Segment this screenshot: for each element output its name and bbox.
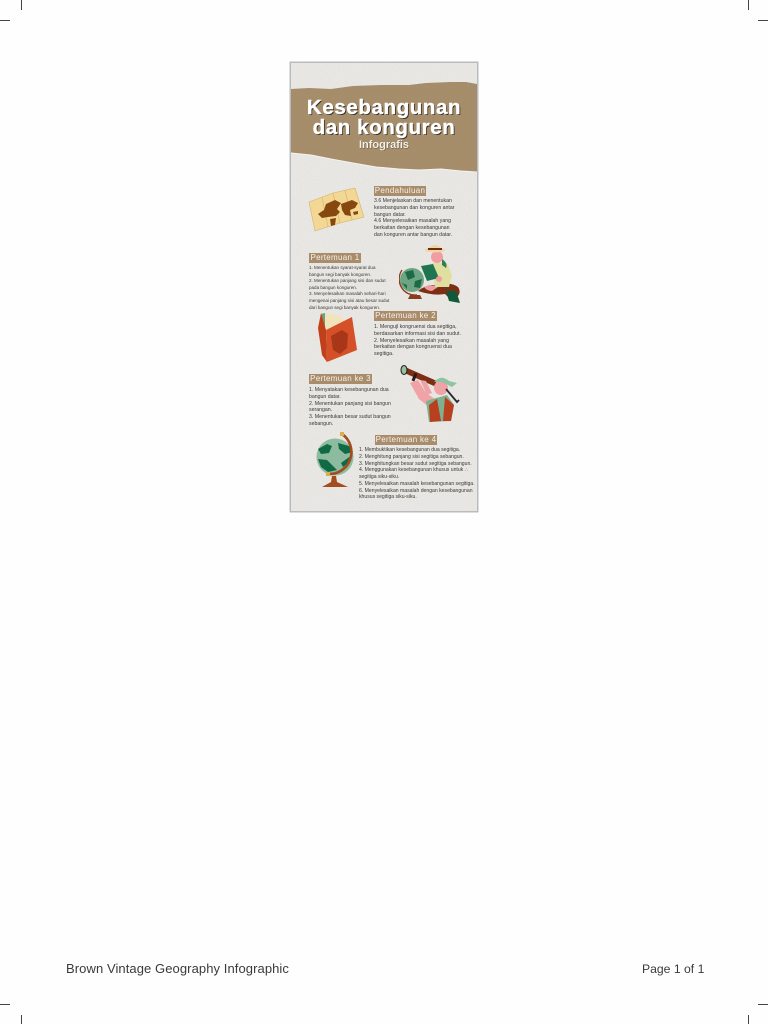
- icon: explorer with globe: [399, 245, 460, 303]
- text: Pertemuan 1 body: [309, 265, 390, 310]
- torn paper header band: [291, 63, 477, 511]
- title: [307, 96, 461, 139]
- section: Pertemuan 1: [309, 253, 390, 310]
- title: Kesebangunan: [307, 96, 461, 119]
- text: Pertemuan 1 body: pada bangun konguren.: [309, 285, 357, 290]
- text: Pertemuan ke 4 body: 6. Menyelesaikan masalah dengan kesebangunan: [359, 488, 473, 494]
- infographic poster: [291, 63, 477, 511]
- text: Pertemuan ke 4 body: 3. Menghitungkan besar sudut segitiga sebangun.: [359, 460, 472, 466]
- text: Pertemuan ke 3 body: serangan.: [309, 407, 332, 413]
- text: Pertemuan ke 2 body: 2. Menyelesaikan masalah yang: [374, 338, 449, 344]
- text: Pertemuan ke 4 body: 1. Membuktikan kesebangunan dua segitiga.: [359, 447, 460, 453]
- text: Pertemuan ke 3 body: 1. Menyatakan kesebangunan dua: [309, 387, 389, 393]
- section: Pertemuan ke 4: [359, 435, 475, 500]
- heading: Pertemuan 1: Pertemuan 1: [310, 253, 360, 262]
- text: Pendahuluan body: dan konguren antar bangun datar.: [374, 232, 452, 238]
- text: Pertemuan ke 3 body: [309, 387, 391, 427]
- text: Pendahuluan body: berkaitan dengan kesebangunan: [374, 225, 450, 231]
- text: Pendahuluan body: kesebangunan dan konguren antar: [374, 205, 454, 211]
- subtitle: Infografis: [359, 139, 409, 151]
- text: Pertemuan ke 3 body: sebangun.: [309, 421, 333, 427]
- text: Pertemuan 1 body: dari bangun segi banyak konguren.: [309, 305, 380, 310]
- heading: Pertemuan ke 3: Pertemuan ke 3: [310, 374, 371, 383]
- text: Pertemuan ke 2 body: 1. Mengujl kongruensi dua segitiga,: [374, 324, 457, 330]
- text: Pertemuan ke 4 body: khusus segitiga siku-siku.: [359, 494, 417, 500]
- text: Pertemuan 1 body: mengenai panjang sisi atau besar sudut: [309, 298, 389, 303]
- icon: globe: [316, 432, 354, 487]
- text: Pertemuan ke 3 body: 3. Menentukan besar sudut bangun: [309, 414, 391, 420]
- text: Pertemuan ke 4 body: 4. Menggunakan kesebangunan khusus untuk ∴: [359, 467, 468, 473]
- footer: document title: Brown Vintage Geography Infographic: [66, 961, 289, 976]
- text: Pertemuan ke 3 body: bangun datar.: [309, 394, 341, 400]
- text: Pertemuan 1 body: 1. Menentukan syarat-syarat dua: [309, 265, 375, 270]
- text: Pertemuan ke 2 body: segitiga.: [374, 351, 394, 357]
- text: Pertemuan ke 4 body: segitiga siku-siku.: [359, 474, 399, 480]
- text: Pertemuan ke 2 body: berkaitan dengan kongruensi dua: [374, 344, 452, 350]
- text: Pendahuluan body: bangun datar.: [374, 212, 406, 218]
- icon: explorer with telescope: [400, 365, 460, 422]
- heading: Pertemuan ke 4: Pertemuan ke 4: [376, 435, 436, 444]
- heading: Pertemuan ke 2: Pertemuan ke 2: [375, 311, 436, 320]
- text: Pertemuan 1 body: bangun segi banyak konguren.: [309, 272, 371, 277]
- title: dan konguren: [313, 116, 455, 139]
- text: Pertemuan ke 4 body: 5. Menyelesaikan masalah kesebangunan segitiga.: [359, 481, 475, 487]
- text: Pendahuluan body: 3.6 Menjelaskan dan menentukan: [374, 198, 452, 204]
- section: Pertemuan ke 2: [374, 311, 461, 357]
- text: Pertemuan 1 body: 3. Menyelesaikan masalah sehari-hari: [309, 291, 386, 296]
- icon: red book: [318, 313, 357, 362]
- text: Pertemuan ke 4 body: 2. Menghitung panjang sisi segitiga sebangun.: [359, 454, 464, 460]
- text: Pertemuan 1 body: 2. Menentukan panjang sisi dan sudut: [309, 278, 386, 283]
- section: Pendahuluan: [374, 186, 454, 238]
- text: Pertemuan ke 4 body: [359, 447, 475, 500]
- section: Pertemuan ke 3: [309, 374, 391, 427]
- text: Pertemuan ke 2 body: berdasarkan informasi sisi dan sudut.: [374, 331, 461, 337]
- text: Pertemuan ke 3 body: 2. Menentukan panjang sisi bangun: [309, 400, 391, 406]
- text: Pertemuan ke 2 body: [374, 324, 461, 357]
- icon: treasure map: [308, 188, 364, 232]
- footer: page number: Page 1 of 1: [642, 962, 704, 976]
- heading: Pendahuluan: Pendahuluan: [375, 186, 425, 195]
- text: Pendahuluan body: [374, 198, 454, 238]
- text: Pendahuluan body: 4.6 Menyelesaikan masalah yang: [374, 218, 451, 224]
